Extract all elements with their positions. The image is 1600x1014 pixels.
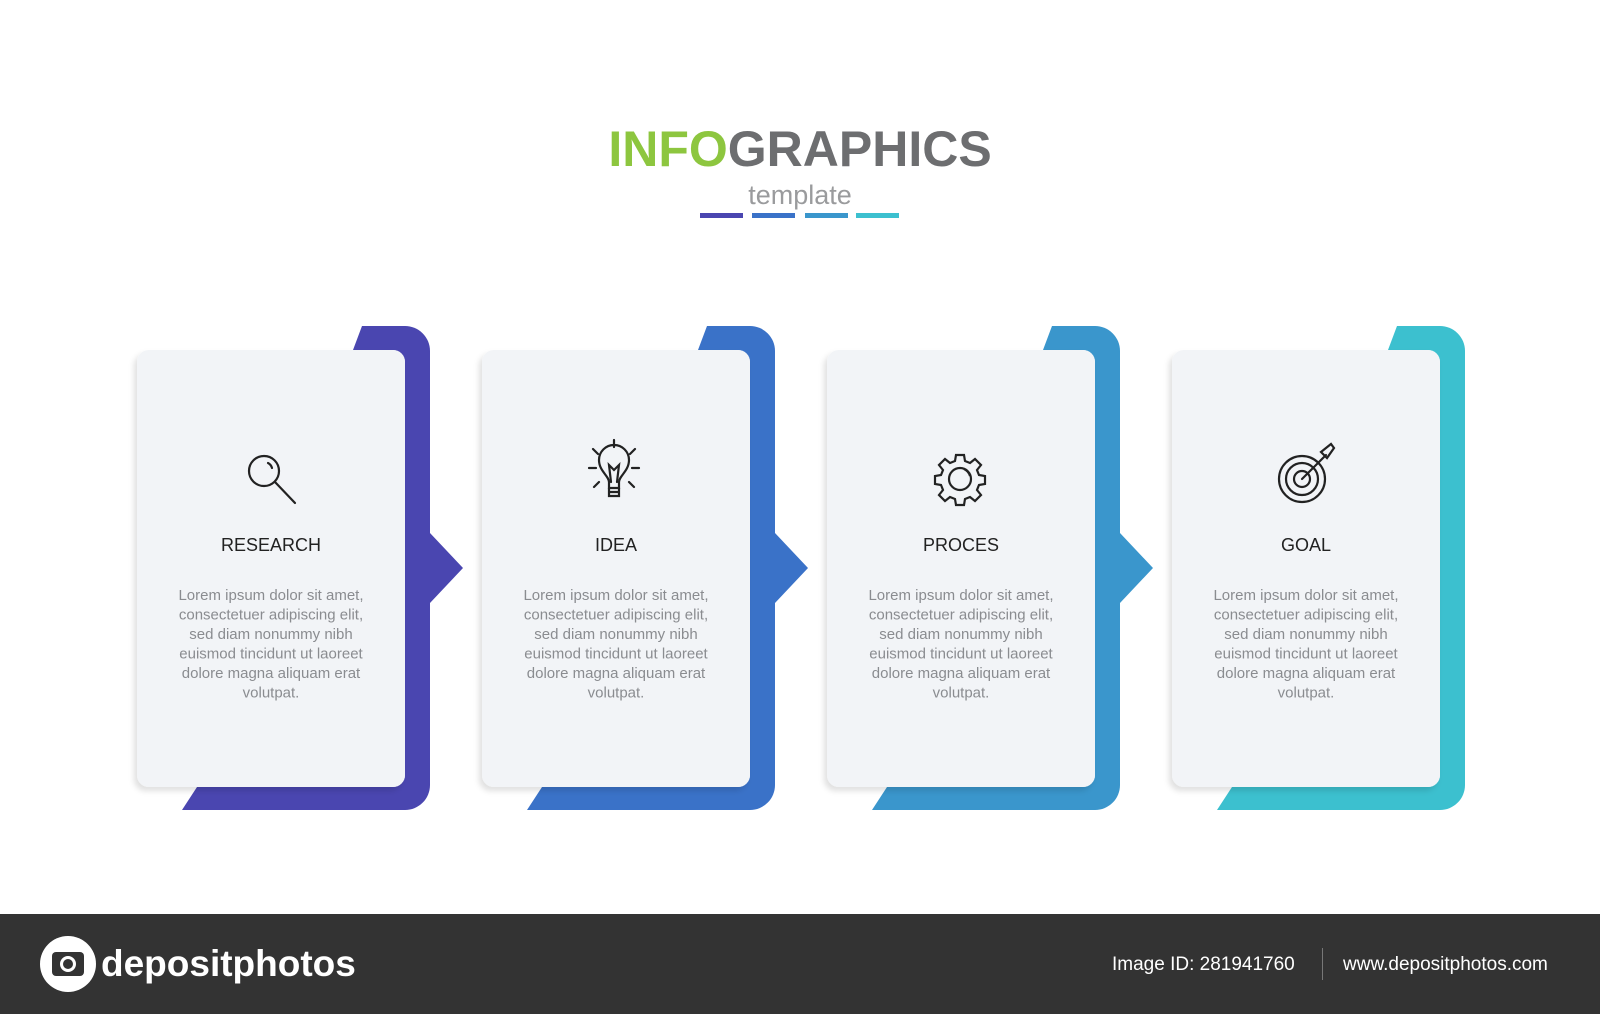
image id: Image ID: 281941760: [1112, 954, 1295, 975]
icon: magnifier: [249, 456, 295, 503]
url: www.depositphotos.com: [1342, 954, 1548, 975]
icon: gear: [935, 455, 985, 505]
heading: IDEA: [595, 535, 637, 555]
heading: PROCES: [923, 535, 999, 555]
footer bar: [0, 914, 1600, 1014]
panel: proces: [827, 326, 1153, 810]
panel: research: [137, 326, 463, 810]
logo icon: [40, 936, 96, 992]
panel: idea: [482, 326, 808, 810]
panel: goal: [1172, 326, 1465, 810]
heading: GOAL: [1281, 535, 1331, 555]
subtitle: template: [748, 180, 852, 210]
icon: target: [1279, 444, 1334, 502]
title: INFOGRAPHICS: [608, 121, 992, 177]
underline bars: [700, 213, 899, 218]
icon: light bulb: [589, 440, 639, 496]
logo text: depositphotos: [101, 943, 356, 984]
heading: RESEARCH: [221, 535, 321, 555]
title: [608, 121, 992, 210]
